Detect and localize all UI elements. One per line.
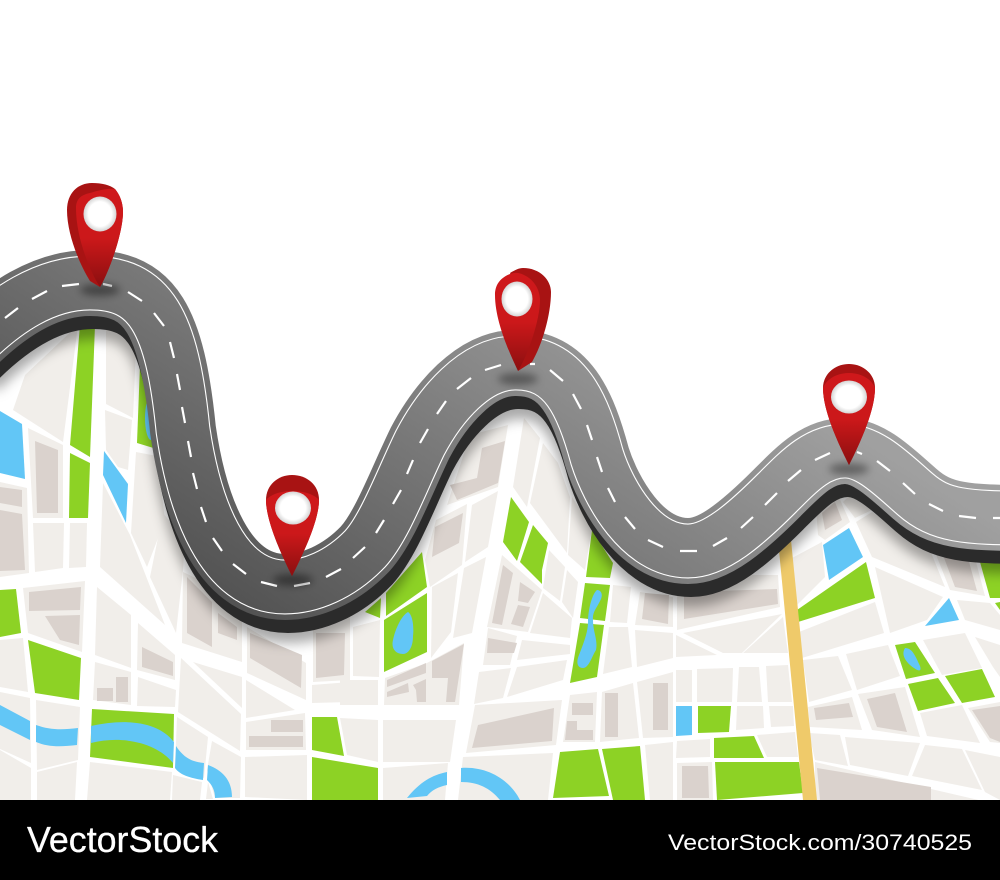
watermark bar bbox=[0, 800, 1000, 880]
road underside bbox=[0, 296, 1000, 600]
pin 4 shadow bbox=[829, 463, 869, 475]
winding road bbox=[0, 283, 1000, 600]
buildings bbox=[0, 441, 1000, 800]
city map bbox=[0, 329, 1000, 800]
pin 3 bbox=[495, 268, 551, 385]
road surface bbox=[0, 283, 1000, 587]
water bbox=[0, 396, 959, 800]
road centre dashes bbox=[5, 284, 1000, 586]
pin 3 shadow bbox=[498, 373, 538, 385]
parks bbox=[0, 325, 1000, 800]
pin 2 dot bbox=[275, 492, 311, 524]
pin 2 bbox=[266, 475, 319, 586]
pin 4 bbox=[823, 364, 875, 475]
pin 2 body bbox=[266, 475, 319, 576]
image url: VectorStock.com/30740525 bbox=[668, 830, 972, 855]
pin 3 body bbox=[510, 268, 551, 371]
pin 1 body bbox=[67, 183, 123, 287]
pin 3 dot bbox=[502, 282, 532, 316]
pin 1 dot bbox=[84, 196, 116, 232]
map street base bbox=[0, 250, 1000, 800]
pin 2 shadow bbox=[273, 574, 313, 586]
brand name: VectorStock bbox=[27, 819, 219, 860]
pin 1 shadow bbox=[80, 284, 120, 296]
pin 1 bbox=[67, 183, 123, 296]
city blocks bbox=[0, 325, 1000, 805]
road shadow on map bbox=[0, 305, 1000, 609]
pin 4 body bbox=[823, 364, 875, 465]
pin 4 dot bbox=[831, 380, 867, 414]
infographic: winding road over city map bbox=[0, 183, 1000, 880]
road edge lines bbox=[0, 283, 1000, 587]
yellow highway bbox=[778, 540, 817, 800]
